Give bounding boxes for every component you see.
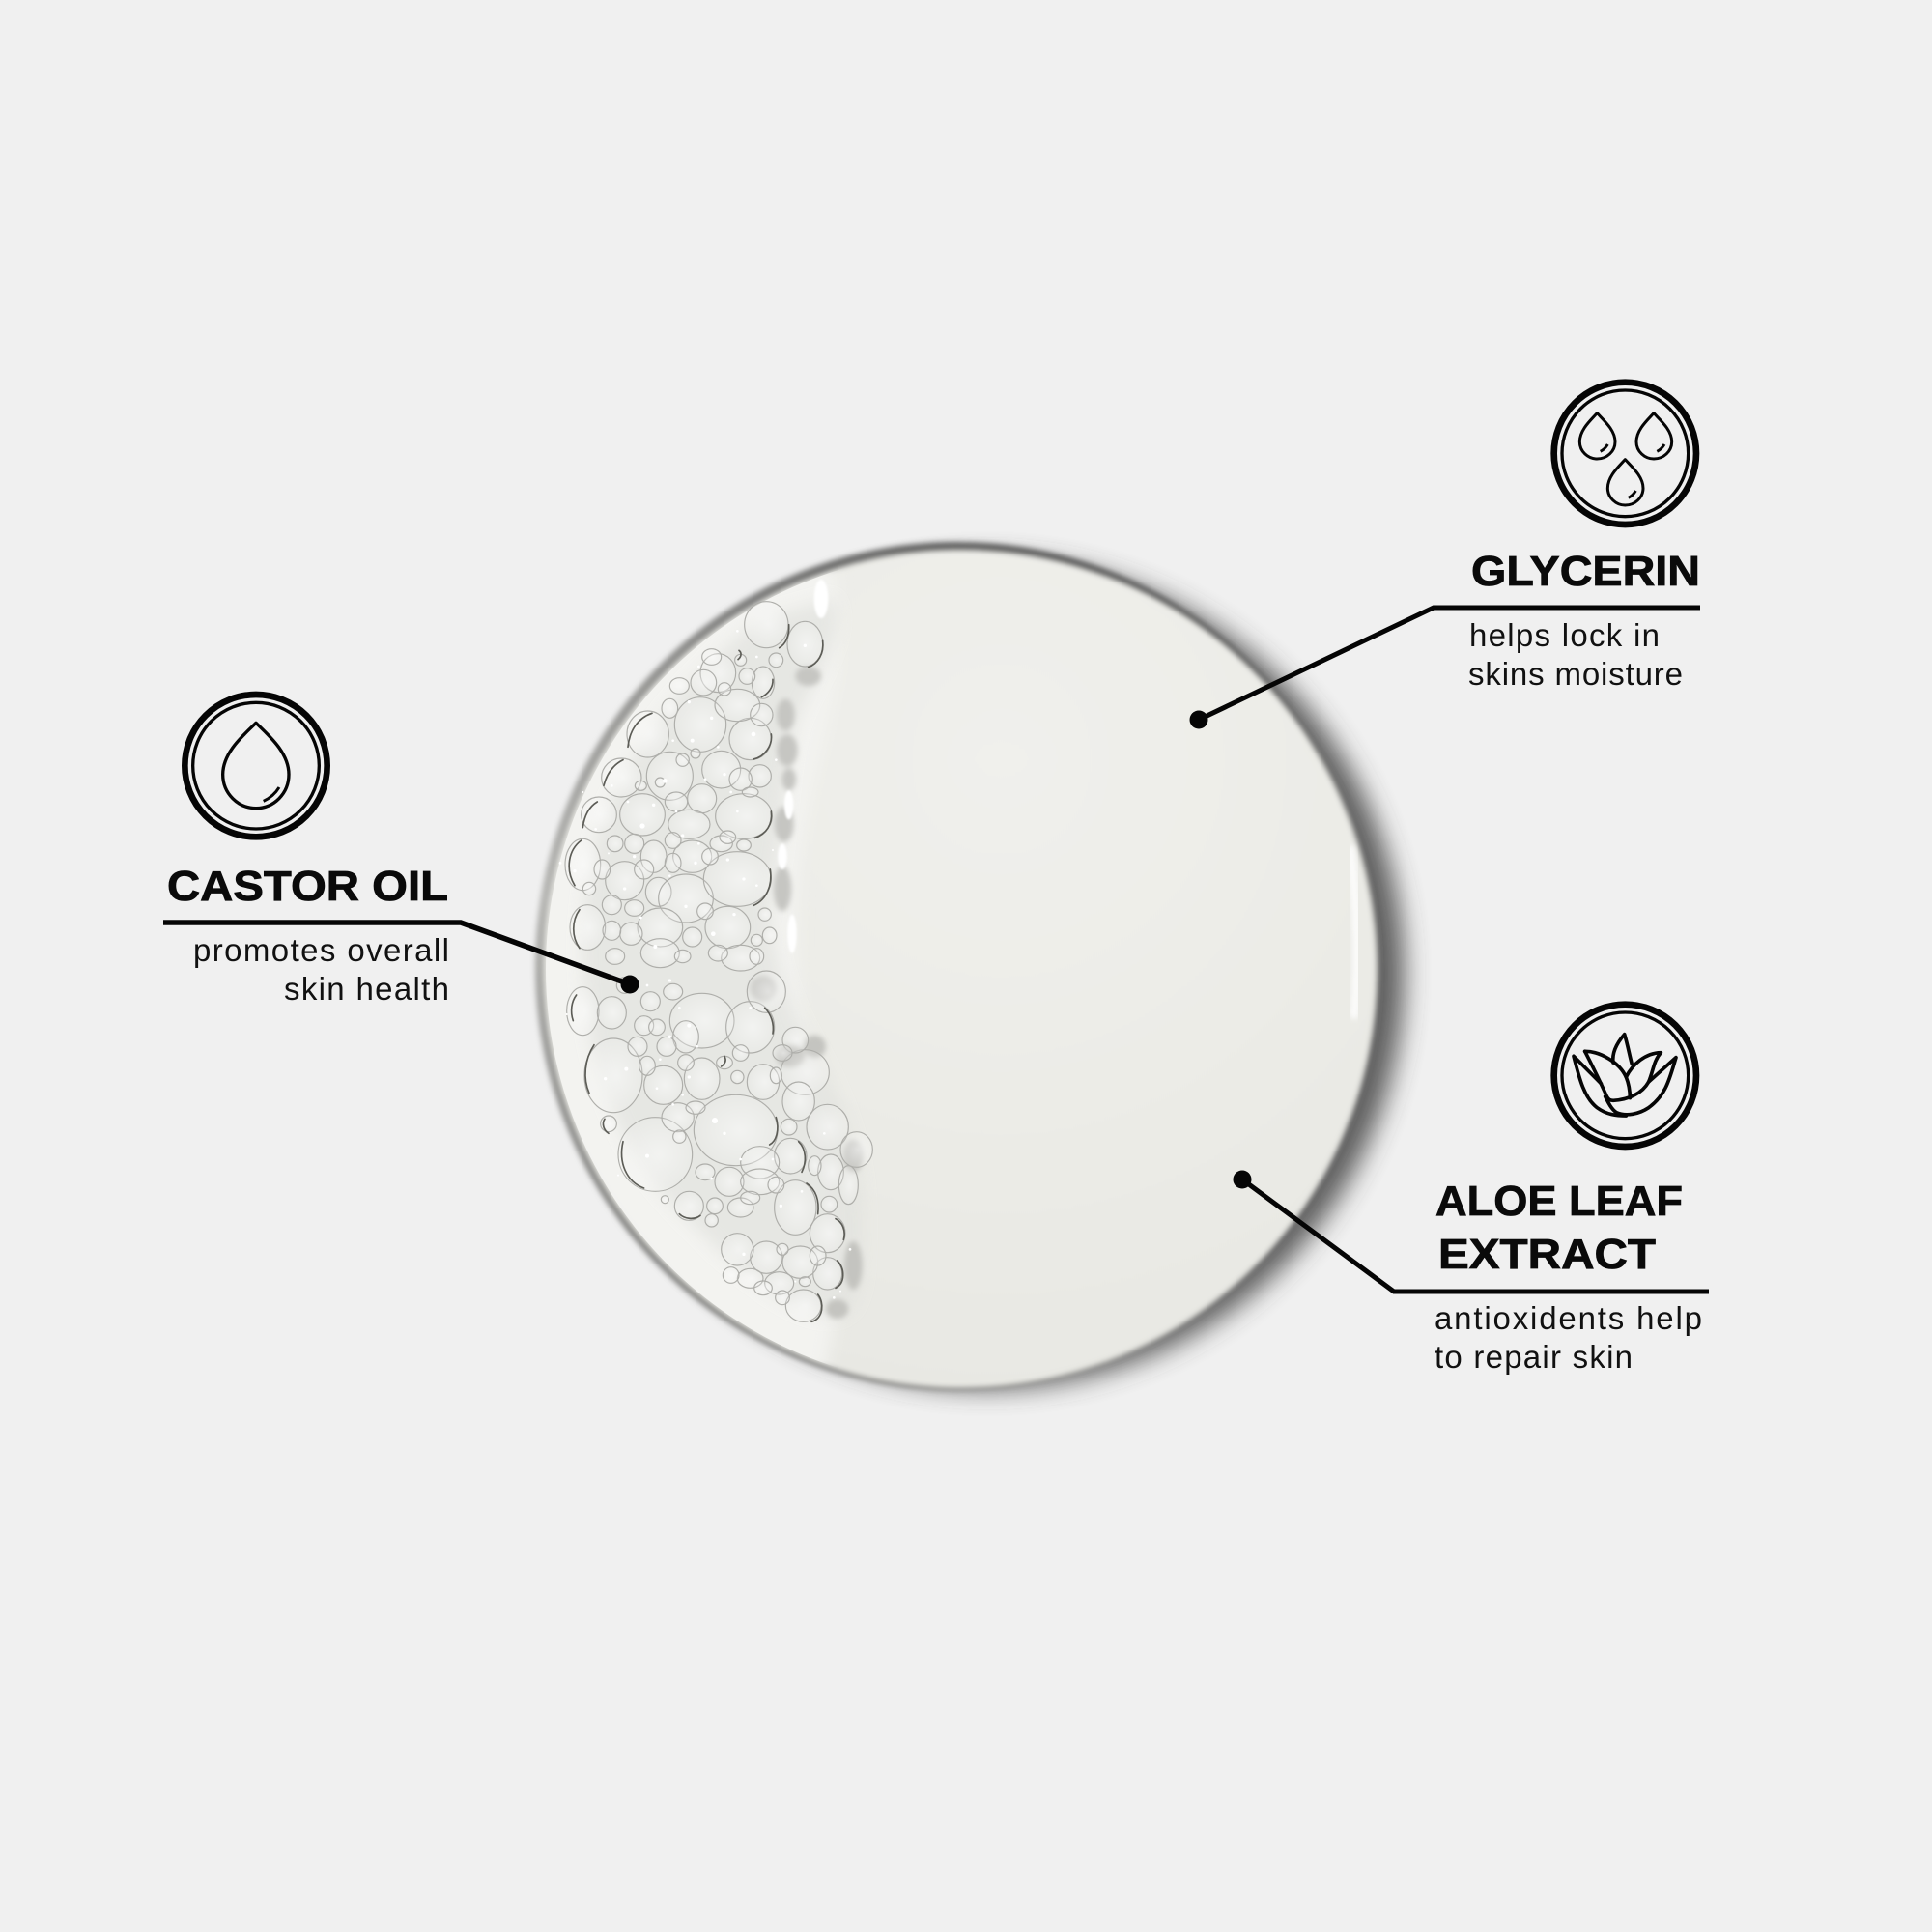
description: glycerin bbox=[1468, 617, 1683, 692]
description: aloe leaf extract bbox=[1435, 1300, 1702, 1375]
surface highlights bbox=[1350, 850, 1357, 1014]
foam specular streaks bbox=[778, 580, 828, 953]
description: aloe leaf extract: antioxidents help bbox=[1435, 1300, 1702, 1336]
icon: three drops bbox=[1554, 383, 1696, 525]
heading: aloe leaf extract: ALOE LEAF bbox=[1435, 1178, 1683, 1225]
leader line: glycerin bbox=[1190, 608, 1700, 728]
callout: glycerin bbox=[1190, 383, 1700, 728]
callout: aloe leaf extract bbox=[1233, 1005, 1709, 1375]
description: castor oil: skin health bbox=[284, 971, 449, 1007]
foam base bbox=[582, 599, 862, 1316]
blob body bbox=[544, 550, 1377, 1388]
blob rim bbox=[535, 542, 1378, 1390]
product swatch: serum blob with foam bbox=[522, 522, 1405, 1401]
description: aloe leaf extract: to repair skin bbox=[1435, 1339, 1633, 1375]
foam bubbles lower bbox=[566, 971, 872, 1321]
lower foam shadow lobes bbox=[751, 976, 863, 1319]
foam edge shadow lobes bbox=[774, 667, 821, 911]
icon: single oil drop bbox=[185, 695, 327, 837]
heading: castor oil: CASTOR OIL bbox=[167, 863, 448, 910]
description: glycerin: helps lock in bbox=[1469, 617, 1660, 653]
leader line: aloe leaf extract bbox=[1233, 1171, 1709, 1292]
heading: glycerin: GLYCERIN bbox=[1471, 548, 1700, 595]
leader line: castor oil bbox=[163, 923, 639, 993]
foam bubbles upper bbox=[559, 580, 828, 971]
description: glycerin: skins moisture bbox=[1468, 656, 1683, 692]
icon: aloe plant bbox=[1554, 1005, 1696, 1147]
heading: aloe leaf extract: EXTRACT bbox=[1438, 1231, 1656, 1278]
description: castor oil: promotes overall bbox=[193, 932, 449, 968]
clear left zone bbox=[546, 570, 838, 1366]
heading: aloe leaf extract bbox=[1435, 1178, 1683, 1278]
description: castor oil bbox=[193, 932, 449, 1007]
callout: castor oil bbox=[163, 695, 639, 1007]
drop shadow bbox=[570, 558, 1405, 1389]
